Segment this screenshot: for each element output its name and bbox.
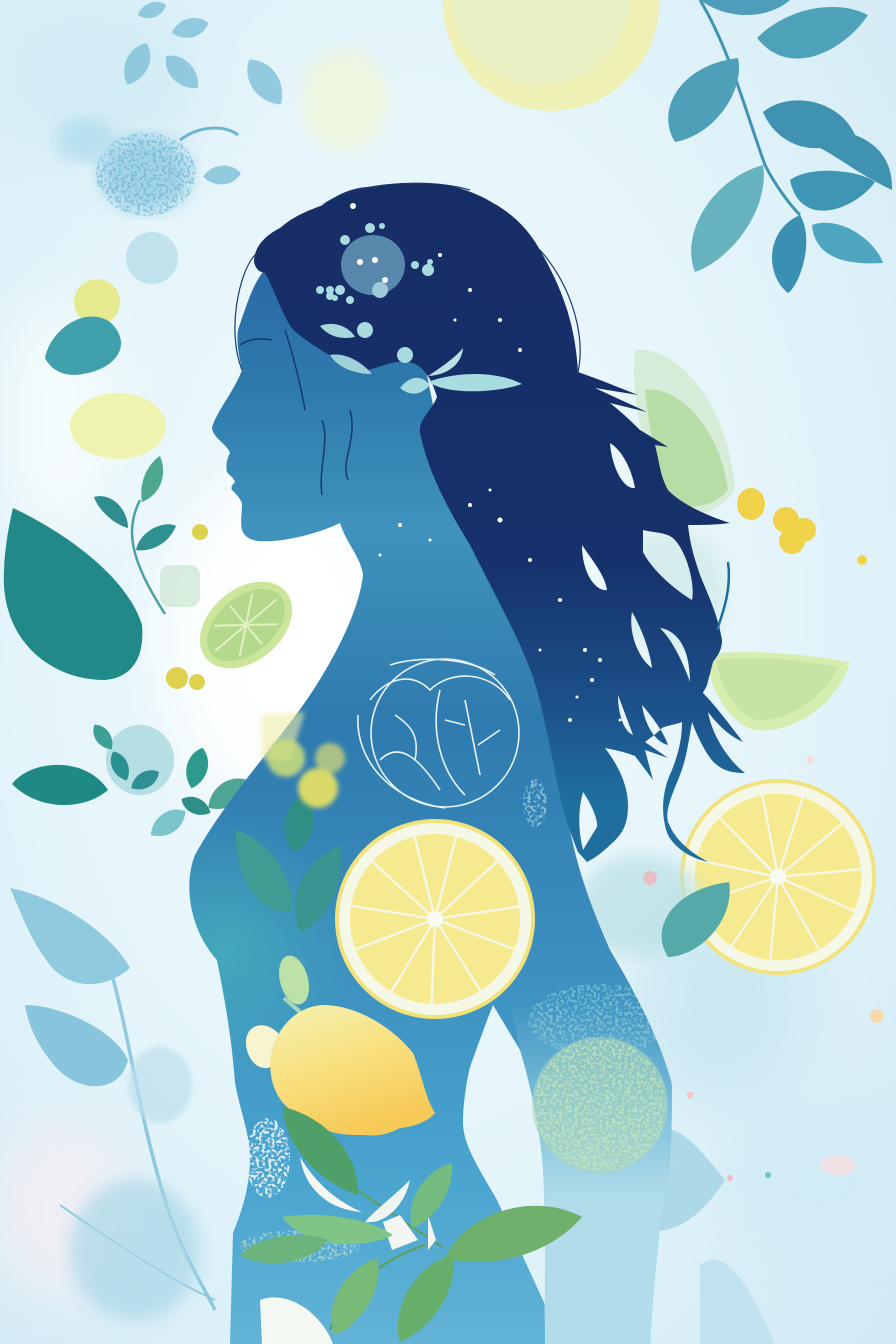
large teal leaf xyxy=(4,508,142,680)
hair strands near face xyxy=(240,330,352,495)
hair flower xyxy=(316,203,522,394)
line-art stomach icon on chest xyxy=(358,659,519,808)
hair outline wisps xyxy=(235,183,580,372)
speckled blue leaf cluster xyxy=(55,118,238,216)
top right branch xyxy=(668,0,892,293)
small teal leaf with yellow bud xyxy=(45,279,121,375)
pale speckled wash between hair strands xyxy=(615,530,725,650)
lower left pale branch xyxy=(10,888,215,1320)
lime wedge left xyxy=(183,564,309,686)
yellow flowers on shoulder xyxy=(262,712,345,808)
green leaf sprig xyxy=(240,1107,582,1344)
centre lemon slice xyxy=(327,811,543,1027)
small green oval xyxy=(274,952,314,1012)
scattered colour dots xyxy=(643,756,884,1181)
lower right leaf wash xyxy=(578,855,775,1344)
left mid leaf cluster xyxy=(12,720,254,844)
top left pale leaves xyxy=(117,0,292,186)
right side flyaway strand xyxy=(717,562,729,630)
speckle near chest xyxy=(523,779,547,827)
yellow blossoms xyxy=(737,488,867,565)
pale blue disc xyxy=(126,232,178,284)
whole lemon xyxy=(246,1005,435,1135)
small sprig xyxy=(94,456,176,614)
right lemon slice xyxy=(667,766,889,988)
lime wedge right xyxy=(705,652,850,730)
pale square wash xyxy=(160,565,200,607)
faded top pale lemon xyxy=(301,48,389,152)
top lemon xyxy=(443,0,659,111)
left pale lemon xyxy=(70,393,166,459)
white stars on hair xyxy=(378,488,622,722)
leaves on chest xyxy=(236,793,341,932)
body silhouette xyxy=(180,270,690,1344)
hair xyxy=(254,183,745,862)
faded lime on arm xyxy=(532,1037,668,1173)
yellow dots xyxy=(166,524,208,690)
pale lime behind hair xyxy=(634,350,735,515)
